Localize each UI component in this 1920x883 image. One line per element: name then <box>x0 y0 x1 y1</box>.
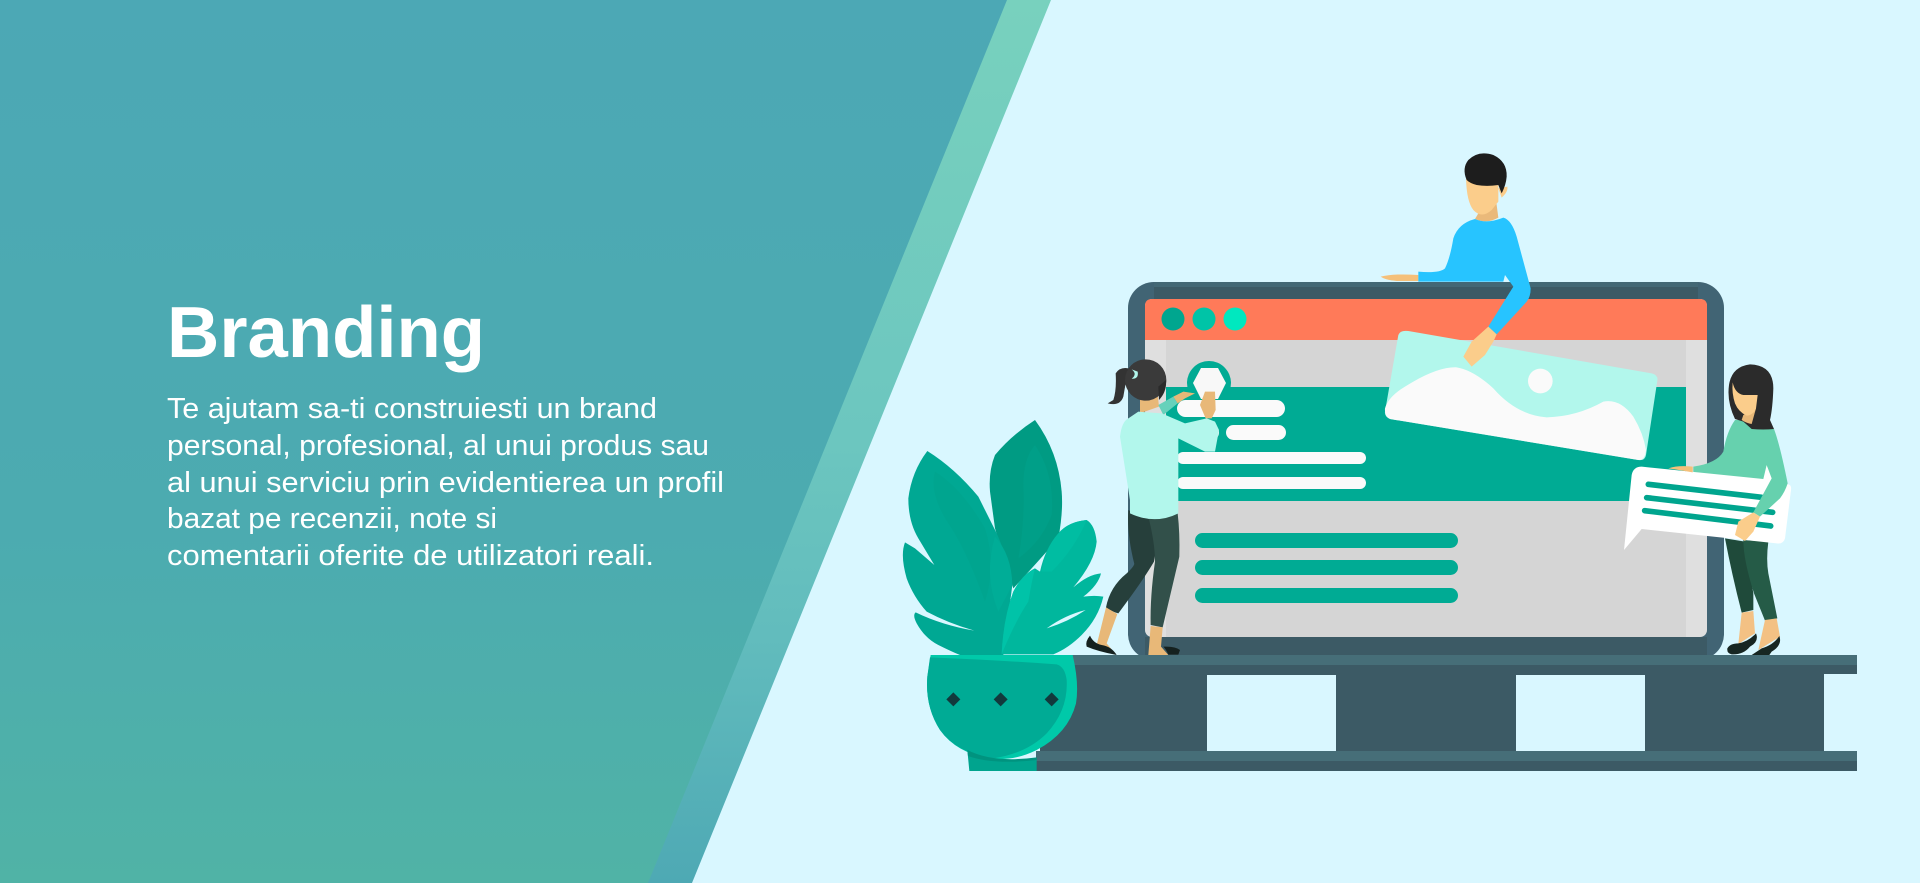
pot base <box>967 750 1037 771</box>
potted plant <box>903 420 1103 771</box>
monitor <box>1128 282 1724 660</box>
person: woman at left <box>1086 359 1219 655</box>
card lines <box>1645 484 1773 526</box>
left teal panel <box>0 0 1007 883</box>
image card <box>1385 331 1657 460</box>
description text: bazat pe recenzii, note si <box>167 503 497 535</box>
description text: comentarii oferite de utilizatori reali. <box>167 540 654 572</box>
diagonal accent band <box>647 0 1051 883</box>
person: man above monitor <box>1381 153 1531 367</box>
description text: Te ajutam sa-ti construiesti un brand <box>167 393 657 425</box>
head, shirt and arms <box>1108 359 1219 519</box>
woman hand and arm over card <box>1668 429 1788 541</box>
description text: al unui serviciu prin evidentierea un profil <box>167 467 724 499</box>
title: Branding <box>167 293 485 373</box>
logo badge <box>1187 361 1231 405</box>
green hero band <box>1166 387 1686 501</box>
shelf <box>1036 655 1857 771</box>
window dots <box>1162 308 1246 330</box>
legs and shoes <box>1086 510 1180 655</box>
right leaf <box>1002 520 1103 654</box>
back leaf <box>990 420 1062 588</box>
leaves <box>903 420 1103 655</box>
left leaf <box>903 451 1012 655</box>
legs and shoes <box>1725 538 1780 655</box>
white text bars <box>1177 400 1366 489</box>
browser title bar <box>1145 299 1707 340</box>
torso, head and hair <box>1693 364 1780 488</box>
description text: personal, profesional, al unui produs sau <box>167 430 709 462</box>
pot diamonds <box>946 692 1059 706</box>
green content bars <box>1195 533 1458 603</box>
speech bubble card <box>1624 429 1791 550</box>
description text <box>167 393 724 572</box>
person: woman at right, lower body <box>1693 364 1780 655</box>
pot bowl <box>927 655 1077 771</box>
